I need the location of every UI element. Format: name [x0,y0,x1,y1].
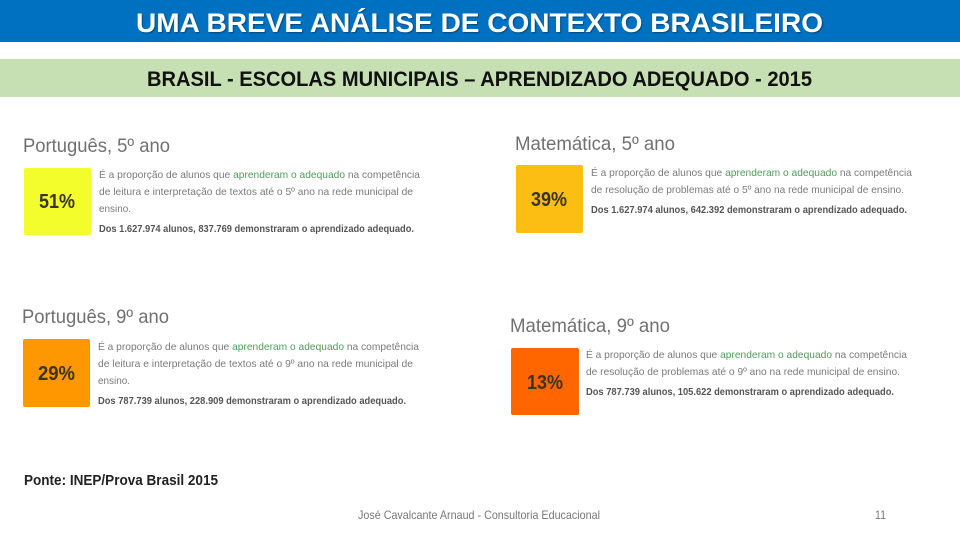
stat box: 51% [24,168,91,235]
stat box: 39%: 39% [531,189,567,211]
subtitle banner: BRASIL - ESCOLAS MUNICIPAIS – APRENDIZADO ADEQUADO - 2015 [147,68,812,91]
description: Matemática 9º ano: Dos 787.739 alunos, 105.622 demonstraram o aprendizado adequado. [586,386,894,398]
description: Português 9º ano: Dos 787.739 alunos, 228.909 demonstraram o aprendizado adequado. [98,395,406,407]
description: Português 5º ano: de leitura e interpretação de textos até o 5º ano na rede municipal de [99,186,413,198]
description: Matemática 5º ano [591,166,912,216]
description: Matemática 9º ano [586,348,907,398]
heading: Matemática 5º ano: Matemática, 5º ano [515,133,675,155]
heading: Matemática 9º ano: Matemática, 9º ano [510,315,670,337]
stat box: 29%: 29% [38,363,75,385]
description: Português 9º ano: ensino. [98,375,130,387]
stat box: 51%: 51% [39,191,75,213]
footer credit: José Cavalcante Arnaud - Consultoria Educacional [358,508,600,522]
description: Matemática 5º ano: É a proporção de alunos que aprenderam o adequado na competência [591,166,912,179]
heading: Português 9º ano: Português, 9º ano [22,306,169,328]
stat box: 13% [511,348,579,415]
description: Português 5º ano: ensino. [99,203,131,215]
stat box: 29% [23,339,90,407]
panel: Português 9º ano [22,306,419,407]
description: Matemática 5º ano: de resolução de problemas até o 5º ano na rede municipal de ensino. [591,184,904,196]
page number: 11 [875,508,886,522]
panel: Português 5º ano [23,135,420,235]
description: Matemática 9º ano: de resolução de problemas até o 9º ano na rede municipal de ensino. [586,366,900,378]
panel: Matemática 9º ano [510,315,907,415]
description: Matemática 9º ano: É a proporção de alunos que aprenderam o adequado na competência [586,348,907,361]
panel: Matemática 5º ano [515,133,912,233]
title banner: UMA BREVE ANÁLISE DE CONTEXTO BRASILEIRO [136,8,823,38]
subtitle banner [0,59,960,97]
description: Matemática 5º ano: Dos 1.627.974 alunos, 642.392 demonstraram o aprendizado adequado. [591,204,907,216]
description: Português 9º ano: É a proporção de alunos que aprenderam o adequado na competência [98,340,419,353]
description: Português 9º ano: de leitura e interpretação de textos até o 9º ano na rede municipal de [98,358,413,370]
description: Português 9º ano [98,340,419,407]
description: Português 5º ano: É a proporção de alunos que aprenderam o adequado na competência [99,168,420,181]
heading: Português 5º ano: Português, 5º ano [23,135,170,157]
stat box: 39% [516,165,583,233]
description: Português 5º ano [99,168,420,235]
title banner [0,0,960,42]
stat box: 13%: 13% [527,372,563,394]
source note: Ponte: INEP/Prova Brasil 2015 [24,473,218,489]
description: Português 5º ano: Dos 1.627.974 alunos, 837.769 demonstraram o aprendizado adequado. [99,223,414,235]
